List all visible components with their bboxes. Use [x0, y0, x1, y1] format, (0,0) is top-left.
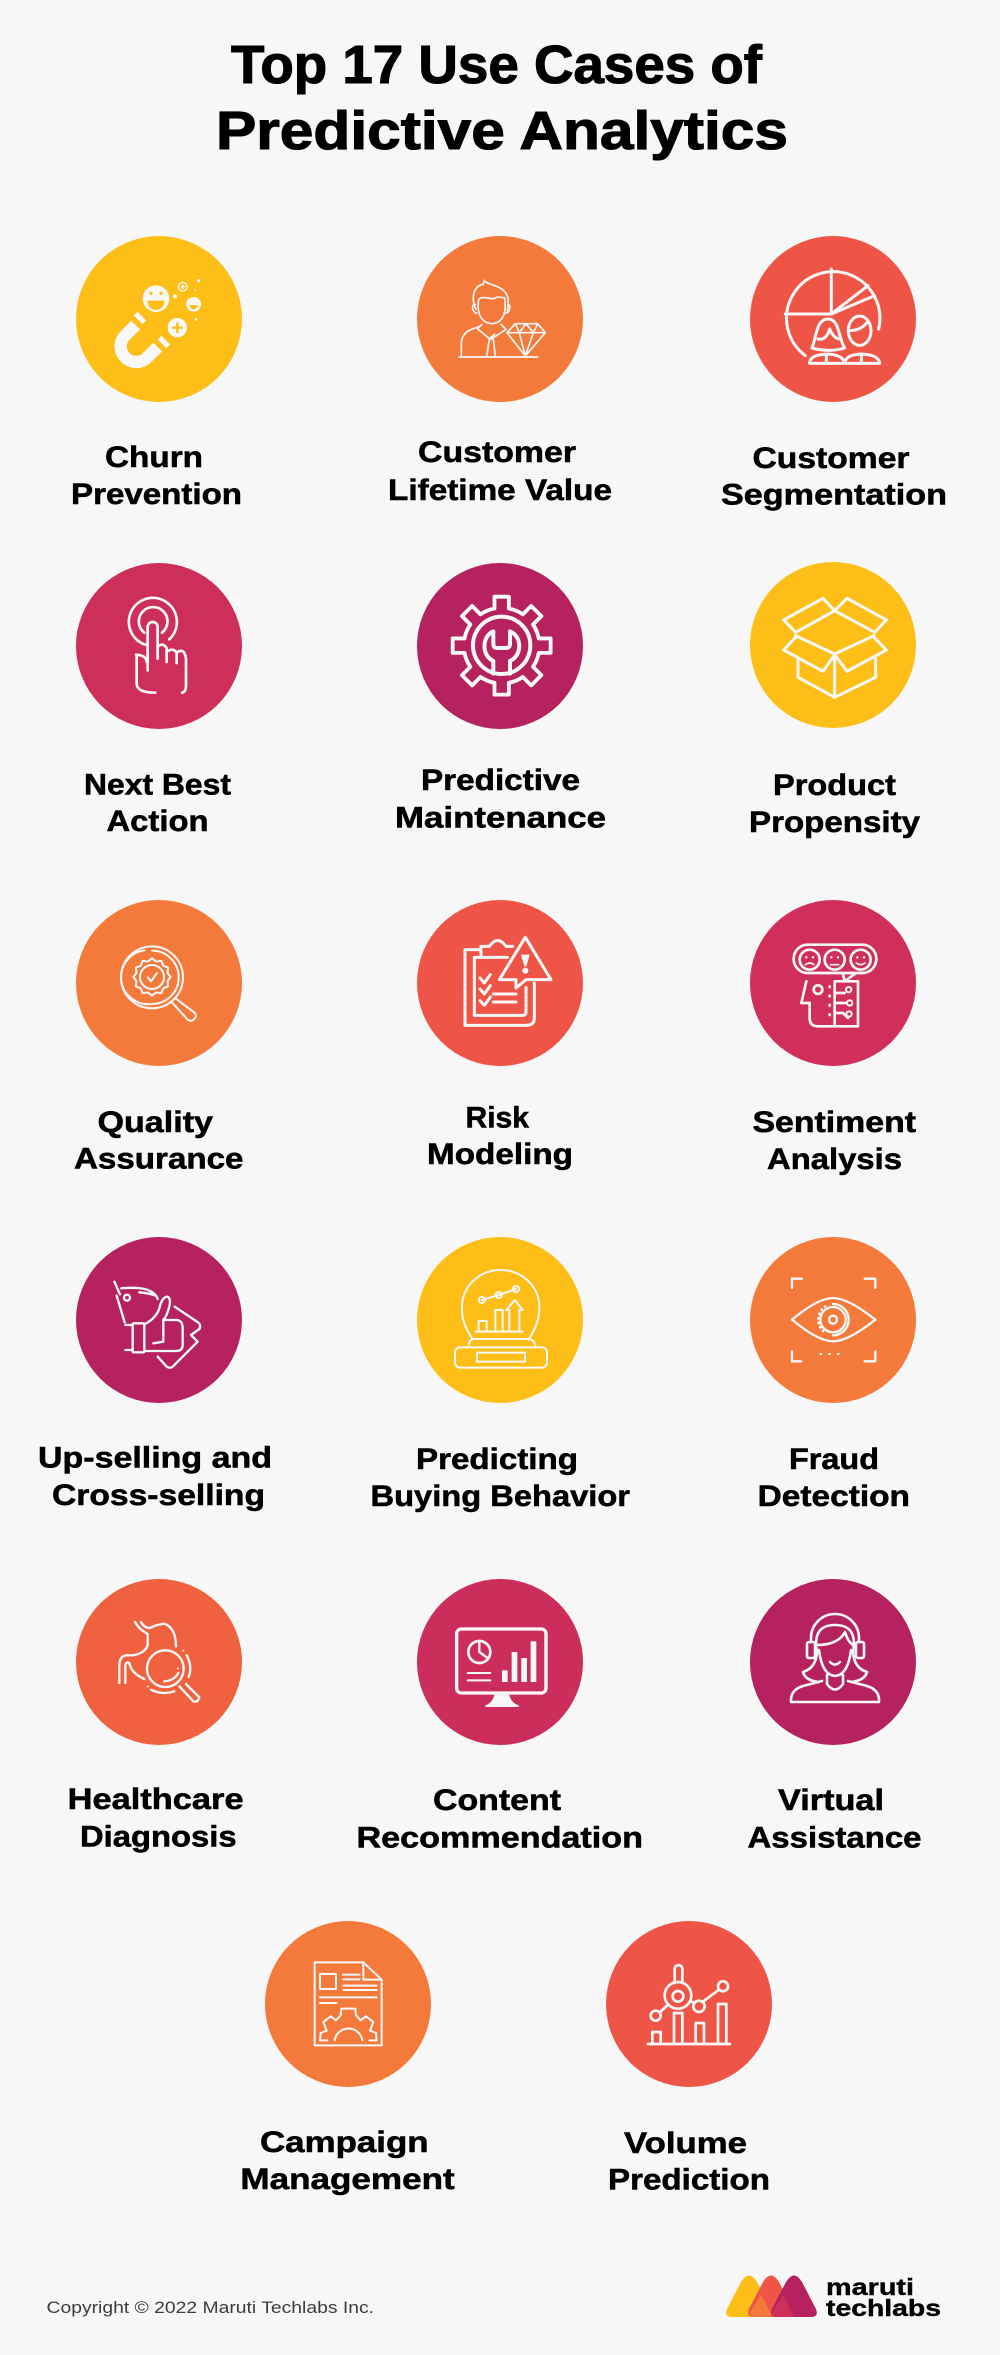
panel: Product Propensity	[749, 562, 920, 839]
label	[356, 1784, 643, 1854]
label: Content	[433, 1784, 561, 1817]
label	[370, 1443, 630, 1513]
label: Predicting	[416, 1443, 578, 1476]
logo: maruti techlabs: techlabs	[826, 2295, 941, 2321]
label: Customer	[418, 436, 576, 469]
label	[240, 2126, 455, 2196]
icon: crystal ball with chart	[455, 1270, 547, 1368]
label: Detection	[758, 1480, 910, 1513]
label: Assistance	[748, 1822, 922, 1854]
panel: Sentiment Analysis	[750, 900, 916, 1176]
title: Predictive Analytics	[216, 101, 788, 161]
panel: Next Best Action	[76, 563, 242, 838]
icon: finger tapping	[129, 598, 186, 693]
panel: Up-selling and Cross-selling	[38, 1237, 272, 1512]
label: Churn	[105, 441, 203, 474]
label: Recommendation	[356, 1822, 643, 1854]
copyright: Copyright © 2022 Maruti Techlabs Inc.	[46, 2299, 374, 2317]
icon: thumbs up with price tags	[114, 1282, 200, 1368]
label	[84, 768, 231, 838]
label: Analysis	[767, 1143, 902, 1176]
panel: Virtual Assistance	[748, 1579, 922, 1854]
panel: Fraud Detection	[750, 1237, 916, 1513]
label	[395, 764, 606, 834]
label: Predictive	[421, 764, 580, 797]
title: Top 17 Use Cases of	[231, 35, 763, 95]
label: Assurance	[74, 1142, 243, 1176]
panel: Content Recommendation	[356, 1579, 643, 1854]
icon: bar chart with nodes	[648, 1965, 730, 2044]
label	[71, 441, 242, 511]
panel: Risk Modeling	[417, 900, 583, 1171]
icon: open box	[784, 598, 886, 697]
panel: Healthcare Diagnosis	[68, 1579, 244, 1854]
label: Healthcare	[68, 1783, 244, 1816]
icon: pie chart with people	[785, 269, 880, 363]
label: Prediction	[608, 2164, 770, 2197]
label: Customer	[752, 442, 910, 475]
panel: Predictive Maintenance	[395, 563, 606, 834]
label: Fraud	[789, 1443, 879, 1476]
label	[68, 1783, 244, 1854]
label: Modeling	[427, 1138, 573, 1171]
icon: monitor dashboard	[457, 1629, 546, 1707]
label: Quality	[98, 1106, 213, 1139]
icon: person with diamond	[459, 280, 545, 357]
label: Sentiment	[752, 1106, 916, 1139]
label: Risk	[466, 1102, 529, 1135]
icon: headset agent	[791, 1614, 879, 1702]
label	[721, 442, 947, 512]
logo: maruti techlabs	[726, 2274, 941, 2321]
label: Propensity	[749, 806, 920, 839]
label: Buying Behavior	[370, 1480, 630, 1513]
icon: gear with wrench	[453, 597, 551, 695]
panel: Customer Lifetime Value	[388, 236, 612, 507]
panel: Quality Assurance	[74, 900, 243, 1176]
panel: Predicting Buying Behavior	[370, 1237, 630, 1513]
label: Prevention	[71, 478, 242, 511]
label	[758, 1443, 910, 1513]
title	[216, 35, 788, 161]
label: Campaign	[260, 2126, 429, 2159]
panel: Campaign Management	[240, 1921, 455, 2196]
label	[749, 769, 920, 839]
label	[38, 1442, 272, 1512]
label	[752, 1106, 916, 1176]
icon: clipboard with warning	[465, 937, 551, 1025]
panel: Volume Prediction	[606, 1921, 772, 2197]
panel: Churn Prevention	[71, 236, 242, 511]
icon: eye scan	[792, 1279, 875, 1361]
label: Diagnosis	[80, 1820, 237, 1854]
label: Up-selling and	[38, 1442, 272, 1475]
label	[427, 1102, 573, 1171]
icon: magnifier over badge	[121, 946, 196, 1021]
label: Next Best	[84, 768, 231, 802]
label: Product	[773, 769, 896, 802]
label: Management	[240, 2163, 455, 2196]
label: Action	[106, 805, 208, 838]
label: Maintenance	[395, 802, 606, 834]
icon: stomach with magnifier	[119, 1622, 199, 1702]
icon: head with emotion faces	[794, 945, 876, 1026]
label: Cross-selling	[52, 1479, 265, 1512]
label	[74, 1106, 243, 1176]
label: Segmentation	[721, 478, 947, 512]
label: Lifetime Value	[388, 474, 612, 507]
label: Volume	[624, 2127, 747, 2160]
label	[388, 436, 612, 507]
label: Virtual	[778, 1784, 884, 1817]
icon: magnet attracting smileys	[121, 279, 201, 362]
icon: document with gear	[315, 1962, 382, 2045]
panel: Customer Segmentation	[721, 236, 947, 512]
label	[748, 1784, 922, 1854]
logo: maruti techlabs: maruti	[826, 2274, 914, 2300]
label	[608, 2127, 770, 2197]
